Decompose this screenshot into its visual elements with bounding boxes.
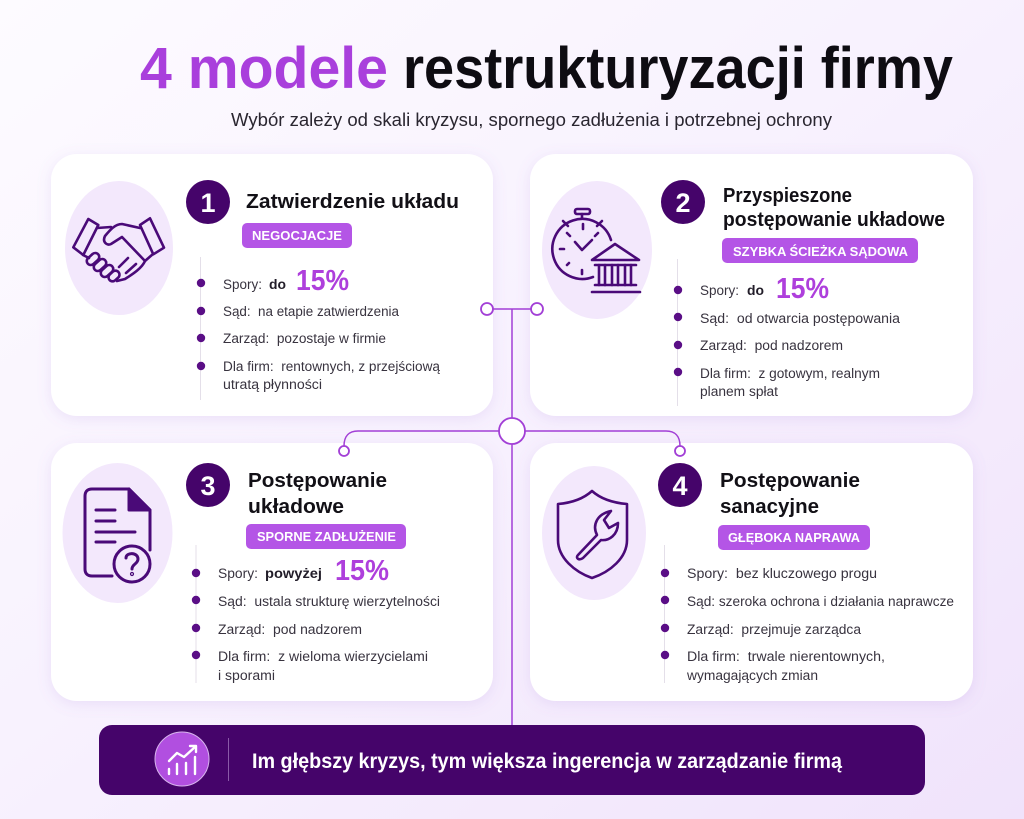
connector lines bbox=[339, 303, 685, 725]
badge: number 4 bbox=[658, 463, 702, 507]
title: restrukturyzacji firmy bbox=[403, 36, 953, 101]
list: Sąd: na etapie zatwierdzenia bbox=[223, 304, 399, 319]
list: Zarząd: pod nadzorem bbox=[218, 622, 362, 637]
list: Dla firm: z gotowym, realnym bbox=[700, 366, 880, 381]
heading: Przyspieszone bbox=[723, 185, 852, 207]
tag: SPORNE ZADŁUŻENIE bbox=[257, 529, 396, 544]
list: Zarząd: przejmuje zarządca bbox=[687, 622, 861, 637]
list: i sporami bbox=[218, 668, 275, 683]
panel: model 2 bbox=[530, 154, 973, 416]
list bbox=[197, 257, 440, 400]
tag: GŁĘBOKA NAPRAWA bbox=[728, 531, 860, 545]
heading: Postępowanie bbox=[248, 470, 387, 492]
tag bbox=[722, 238, 918, 263]
list: Sąd: od otwarcia postępowania bbox=[700, 311, 901, 326]
icon: handshake bbox=[65, 181, 173, 315]
tag: NEGOCJACJE bbox=[252, 229, 342, 243]
list: Dla firm: trwale nierentownych, bbox=[687, 649, 885, 664]
panel: model 4 bbox=[530, 443, 973, 701]
list bbox=[674, 259, 901, 406]
subtitle: Wybór zależy od skali kryzysu, spornego zadłużenia i potrzebnej ochrony bbox=[231, 110, 832, 130]
badge: number 4: 4 bbox=[672, 471, 688, 501]
heading: układowe bbox=[248, 496, 344, 518]
list: Spory: bbox=[700, 283, 739, 298]
heading: Postępowanie bbox=[720, 470, 860, 492]
tag bbox=[242, 223, 352, 248]
list: planem spłat bbox=[700, 384, 778, 399]
list: powyżej bbox=[265, 566, 322, 581]
badge: number 3 bbox=[186, 463, 230, 507]
list: Zarząd: pozostaje w firmie bbox=[223, 331, 386, 346]
list: Dla firm: z wieloma wierzycielami bbox=[218, 649, 428, 664]
tag: SZYBKA ŚCIEŻKA SĄDOWA bbox=[733, 244, 908, 259]
list: Sąd: szeroka ochrona i działania naprawcze bbox=[687, 594, 954, 609]
list: wymagających zmian bbox=[686, 668, 818, 683]
tag bbox=[246, 524, 406, 549]
list: Zarząd: pod nadzorem bbox=[700, 338, 843, 353]
list: Sąd: ustala strukturę wierzytelności bbox=[218, 594, 440, 609]
heading bbox=[723, 185, 945, 231]
badge: number 2 bbox=[661, 180, 705, 224]
list: Spory: bez kluczowego progu bbox=[687, 566, 877, 581]
icon: document with question mark bbox=[62, 463, 172, 603]
icon: stopwatch and courthouse bbox=[542, 181, 652, 319]
panel: model 1 bbox=[51, 154, 493, 416]
list: Dla firm: rentownych, z przejściową bbox=[223, 359, 440, 374]
list: 15% bbox=[296, 265, 349, 297]
heading: sanacyjne bbox=[720, 496, 819, 518]
bottom banner bbox=[99, 725, 925, 795]
list: Spory: bbox=[223, 277, 262, 292]
badge: number 1: 1 bbox=[200, 188, 216, 218]
icon: shield with wrench bbox=[542, 466, 646, 600]
badge: number 2: 2 bbox=[675, 188, 691, 218]
badge: number 3: 3 bbox=[200, 471, 216, 501]
list: utratą płynności bbox=[223, 377, 322, 392]
list: do bbox=[269, 277, 286, 292]
heading bbox=[248, 470, 387, 518]
heading: postępowanie układowe bbox=[723, 209, 945, 231]
panel: model 3 bbox=[51, 443, 493, 701]
title: 4 modele bbox=[140, 36, 388, 101]
tag bbox=[718, 525, 870, 550]
heading: Zatwierdzenie układu bbox=[246, 191, 459, 213]
list: 15% bbox=[335, 555, 389, 587]
title bbox=[140, 36, 953, 101]
list: 15% bbox=[776, 273, 829, 305]
icon: growth chart bbox=[155, 732, 209, 786]
list: Spory: bbox=[218, 566, 258, 581]
badge: number 1 bbox=[186, 180, 230, 224]
banner text: Im głębszy kryzys, tym większa ingerencja w zarządzanie firmą bbox=[252, 750, 842, 773]
list bbox=[192, 545, 440, 683]
list: do bbox=[747, 283, 764, 298]
list bbox=[661, 545, 954, 683]
heading bbox=[720, 470, 860, 518]
